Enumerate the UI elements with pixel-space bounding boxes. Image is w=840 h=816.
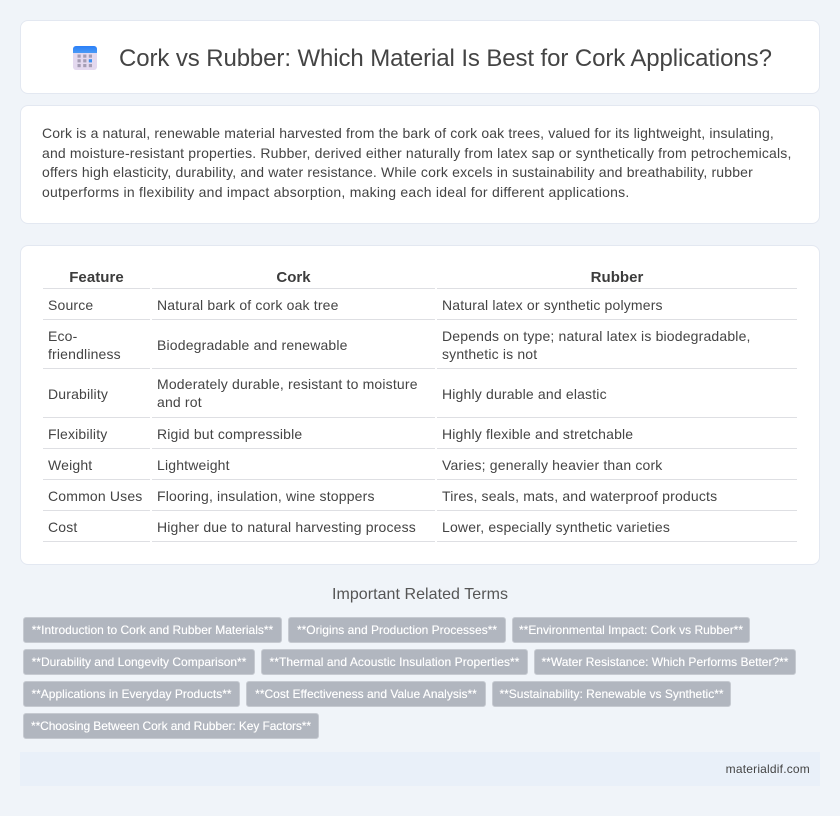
row: durability: Durability	[48, 386, 108, 402]
row: source: Natural bark of cork oak tree	[157, 297, 339, 313]
row: eco-friendliness: friendliness	[48, 346, 121, 362]
row: cost: Lower, especially synthetic varieties	[442, 519, 670, 535]
row: eco-friendliness: Eco-	[48, 328, 77, 344]
row: eco-friendliness: synthetic is not	[442, 346, 537, 362]
title: Cork vs Rubber: Which Material Is Best for Cork Applications?	[119, 45, 772, 72]
row: cost	[48, 519, 670, 535]
row: durability: Moderately durable, resistant to moisture	[157, 376, 418, 392]
row: source	[48, 297, 663, 313]
row: source: Source	[48, 297, 93, 313]
tag	[492, 681, 731, 707]
tag	[246, 681, 486, 707]
row: durability	[48, 376, 607, 410]
icon: calendar	[73, 46, 97, 70]
row: durability: Highly durable and elastic	[442, 386, 607, 402]
tag: **Cost Effectiveness and Value Analysis**	[255, 687, 477, 701]
row: weight	[48, 457, 662, 473]
tag	[23, 681, 240, 707]
table headings: Feature	[69, 269, 124, 286]
intro paragraph: outperforms in flexibility and impact absorption, making each ideal for different applications.	[42, 184, 630, 200]
comparison table	[43, 269, 797, 542]
tag: **Thermal and Acoustic Insulation Properties**	[269, 655, 520, 669]
tag	[512, 617, 750, 643]
intro paragraph	[42, 125, 792, 200]
row: source: Natural latex or synthetic polymers	[442, 297, 663, 313]
tag	[261, 649, 528, 675]
row: common uses: Common Uses	[48, 488, 142, 504]
footer source text: materialdif.com	[726, 762, 810, 776]
table headings: Rubber	[591, 269, 643, 286]
row: common uses: Flooring, insulation, wine stoppers	[157, 488, 375, 504]
row: eco-friendliness: Depends on type; natural latex is biodegradable,	[442, 328, 751, 344]
row: common uses	[48, 488, 717, 504]
row: durability: and rot	[157, 394, 202, 410]
tag	[534, 649, 796, 675]
row: common uses: Tires, seals, mats, and waterproof products	[442, 488, 717, 504]
panel: header	[20, 20, 820, 94]
row: flexibility	[48, 426, 633, 442]
intro paragraph: and moisture-resistant properties. Rubber, derived either naturally from latex sap or synthetically from petrochemicals,	[42, 145, 792, 161]
intro paragraph: Cork is a natural, renewable material harvested from the bark of cork oak trees, valued for its lightweight, insulating,	[42, 125, 774, 141]
table headings	[69, 269, 644, 286]
tag	[23, 649, 255, 675]
intro paragraph: offers high elasticity, durability, and water resistance. While cork excels in sustainability and breathability, rubber	[42, 164, 753, 180]
tag list	[23, 617, 796, 739]
panel: intro text	[20, 105, 820, 224]
heading: important related terms: Important Related Terms	[332, 586, 508, 603]
tag: **Origins and Production Processes**	[297, 623, 497, 637]
tag: **Durability and Longevity Comparison**	[32, 655, 246, 669]
tag: **Sustainability: Renewable vs Synthetic**	[499, 687, 724, 701]
panel: comparison table	[20, 245, 820, 565]
tag	[23, 617, 282, 643]
row: cost: Cost	[48, 519, 77, 535]
footer	[20, 752, 820, 786]
row: cost: Higher due to natural harvesting process	[157, 519, 416, 535]
tag: **Water Resistance: Which Performs Better?**	[542, 655, 788, 669]
row: eco-friendliness	[48, 328, 751, 362]
row: flexibility: Highly flexible and stretchable	[442, 426, 633, 442]
table headings: Cork	[276, 269, 311, 286]
row: flexibility: Flexibility	[48, 426, 107, 442]
tag: **Environmental Impact: Cork vs Rubber**	[519, 623, 743, 637]
tag: **Choosing Between Cork and Rubber: Key Factors**	[31, 719, 311, 733]
row: eco-friendliness: Biodegradable and renewable	[157, 337, 348, 353]
tag: **Applications in Everyday Products**	[31, 687, 232, 701]
row: weight: Varies; generally heavier than cork	[442, 457, 662, 473]
row: weight: Lightweight	[157, 457, 230, 473]
row: flexibility: Rigid but compressible	[157, 426, 302, 442]
tag	[288, 617, 506, 643]
tag	[23, 713, 319, 739]
tag: **Introduction to Cork and Rubber Materials**	[32, 623, 273, 637]
row: weight: Weight	[48, 457, 92, 473]
